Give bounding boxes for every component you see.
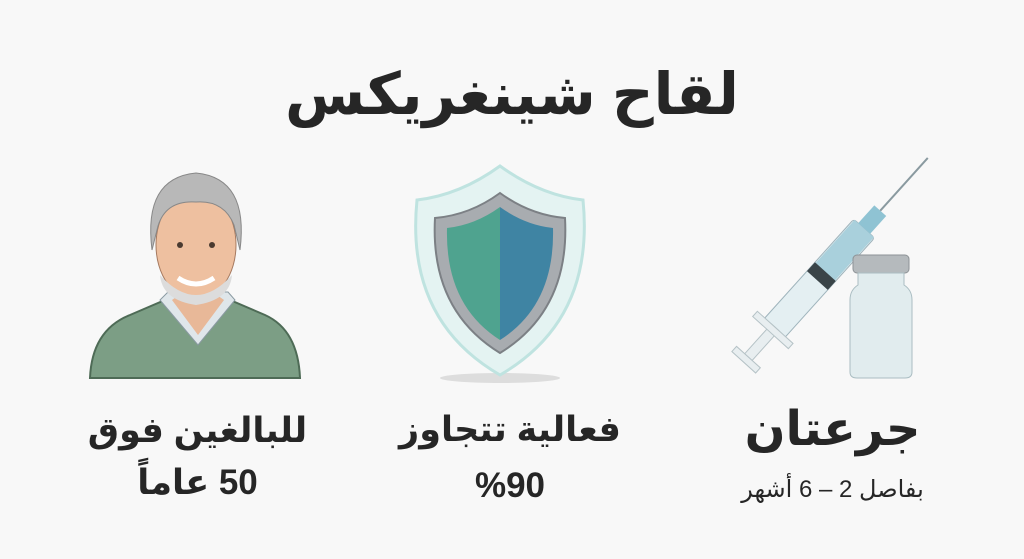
text: efficacy over 90% (398, 410, 621, 505)
text: two doses: جرعتان (745, 403, 920, 456)
icon: syringe and vial (731, 157, 928, 378)
text: adults over 50: 50 عاماً (137, 463, 258, 502)
title: لقاح شينغريكس (285, 62, 739, 127)
text: adults over 50 (88, 411, 307, 502)
text: efficacy over 90%: فعالية تتجاوز (399, 410, 621, 449)
text: 2-6 months apart: بفاصل 2 – 6 أشهر (741, 476, 924, 503)
text: efficacy over 90%: %90 (475, 466, 545, 505)
icon: older man (88, 172, 302, 379)
icon: shield (414, 164, 586, 383)
text: adults over 50: للبالغين فوق (88, 411, 307, 450)
